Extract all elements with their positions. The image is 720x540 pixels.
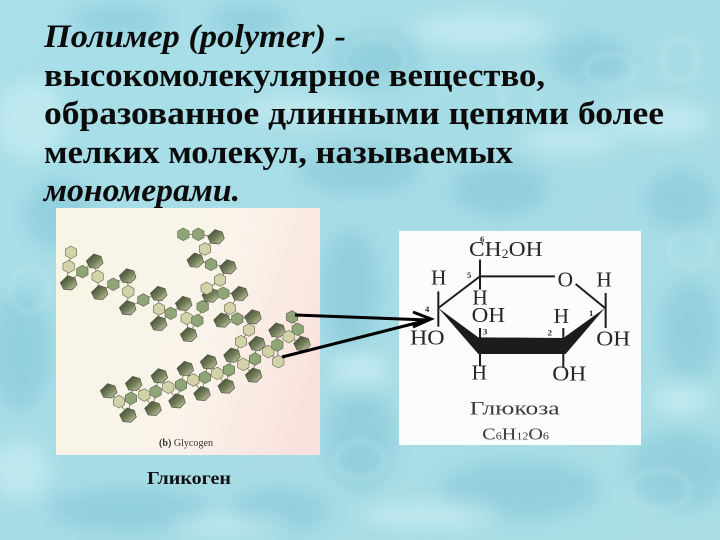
panel: glycogen illustration bbox=[56, 208, 320, 455]
glucose atom labels bbox=[410, 234, 630, 386]
glucose atom labels: H bbox=[596, 267, 612, 291]
title text block: мономерами. bbox=[42, 173, 240, 209]
glucose atom labels: 1 bbox=[589, 308, 593, 318]
glucose atom labels: O bbox=[558, 267, 573, 291]
glycogen branch: lower chain bbox=[100, 311, 310, 422]
label: glycogen: Гликоген bbox=[147, 468, 231, 488]
glucose atom labels: OH bbox=[472, 303, 505, 327]
glucose atom labels: OH bbox=[552, 362, 586, 386]
glycogen branch: top chain bbox=[178, 228, 236, 295]
glucose ring bbox=[438, 260, 606, 368]
glucose atom labels: HO bbox=[410, 326, 445, 350]
title text block: Полимер (polymer) - bbox=[43, 19, 346, 55]
title text block: высокомолекулярное вещество, bbox=[44, 58, 545, 94]
arrows: glycogen to glucose bbox=[282, 312, 431, 357]
glucose atom labels: 2 bbox=[548, 327, 552, 337]
title text block: образованное длинными цепями более bbox=[44, 96, 664, 132]
glucose atom labels: H bbox=[554, 304, 569, 328]
glucose atom labels: 6 bbox=[480, 234, 485, 244]
glucose atom labels: OH bbox=[596, 327, 630, 351]
glucose formula: C6H12O6 bbox=[482, 424, 549, 443]
glucose atom labels: H bbox=[472, 361, 487, 385]
panel: glucose structure bbox=[399, 231, 641, 445]
glucose atom labels: 2 bbox=[502, 247, 509, 261]
glucose atom labels: 3 bbox=[483, 327, 488, 337]
glucose atom labels: 5 bbox=[467, 270, 472, 280]
glycogen image caption: (b) Glycogen bbox=[159, 438, 213, 449]
glucose atom labels: 4 bbox=[425, 304, 430, 314]
glucose atom labels: H bbox=[431, 266, 446, 290]
glycogen branch: upper chain bbox=[60, 246, 261, 355]
glucose atom labels: H bbox=[472, 286, 488, 310]
glucose atom labels: CH bbox=[469, 237, 499, 261]
title text block: мелких молекул, называемых bbox=[44, 135, 514, 171]
title text block bbox=[42, 19, 664, 209]
glucose atom labels: OH bbox=[509, 237, 543, 261]
glucose name: Глюкоза bbox=[470, 399, 560, 420]
